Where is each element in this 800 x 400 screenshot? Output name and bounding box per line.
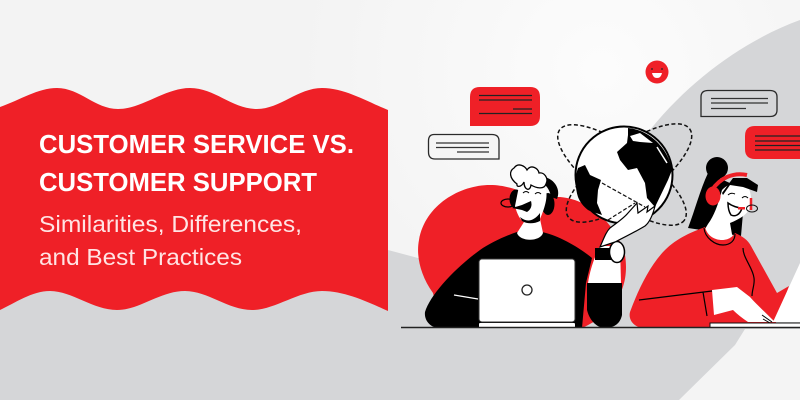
speech bubble: red left	[470, 87, 540, 126]
neck and face	[515, 182, 547, 240]
eyes	[523, 192, 541, 194]
subtitle: Similarities, Differences,	[39, 211, 302, 237]
sleeve	[587, 283, 622, 328]
face details	[728, 193, 748, 198]
sleeve line	[639, 291, 712, 316]
sleeve band	[595, 248, 615, 260]
collar	[704, 228, 735, 245]
chin shadow	[520, 213, 540, 223]
mouth and mic	[512, 201, 532, 212]
hand	[600, 203, 655, 247]
desk line	[401, 326, 800, 328]
hand	[712, 287, 775, 322]
hair	[688, 173, 745, 236]
speech bubble: red right	[745, 126, 800, 159]
globe with orbits	[544, 107, 706, 242]
red blob behind man	[418, 185, 626, 328]
subtitle	[39, 211, 302, 270]
title: CUSTOMER SUPPORT	[39, 167, 317, 197]
banner	[0, 88, 388, 311]
man	[425, 165, 655, 328]
neck and face	[705, 183, 751, 240]
speech bubble: outline right	[701, 90, 777, 116]
laptop	[479, 259, 575, 328]
woman	[630, 157, 800, 328]
title	[39, 129, 354, 197]
sleeve highlight	[454, 295, 478, 299]
sweater seam	[743, 248, 754, 296]
torso	[425, 232, 592, 328]
orbit across globe	[602, 183, 645, 207]
headset	[706, 174, 758, 212]
continents	[576, 128, 672, 215]
icon: smiley	[646, 60, 668, 84]
headset	[501, 190, 554, 215]
hair top	[722, 178, 758, 195]
title: CUSTOMER SERVICE VS.	[39, 129, 354, 159]
sweater	[630, 227, 789, 328]
subtitle: and Best Practices	[39, 244, 242, 270]
speech bubble: outline left	[428, 134, 499, 159]
globe body	[576, 126, 672, 224]
laptop	[710, 263, 800, 328]
watch	[610, 242, 624, 262]
hair	[540, 177, 558, 199]
orbit rings	[544, 107, 706, 242]
forearm	[588, 246, 621, 283]
